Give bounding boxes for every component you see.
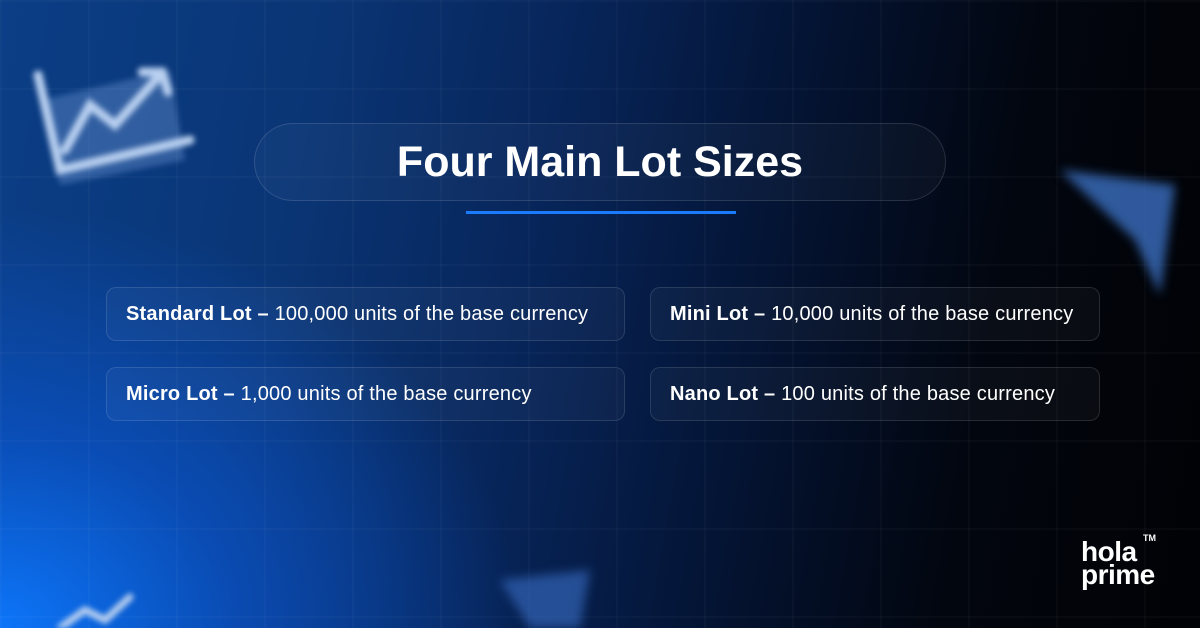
- icon: blurred chart: [30, 63, 198, 186]
- card: nano lot: Nano Lot – 100 units of the base currency: [670, 383, 1055, 405]
- icon: blurred chart bottom: [54, 590, 137, 628]
- title: Four Main Lot Sizes: [397, 138, 803, 186]
- logo: [1081, 533, 1156, 590]
- card: micro lot: Micro Lot – 1,000 units of the base currency: [126, 383, 532, 405]
- title underline: [466, 211, 736, 214]
- logo: prime: [1081, 559, 1155, 590]
- icon: blurred arrow right: [1058, 164, 1182, 296]
- icon: blurred arrow bottom: [498, 565, 594, 628]
- card: nano lot: [650, 367, 1100, 421]
- card: standard lot: [106, 287, 625, 341]
- card: mini lot: [650, 287, 1100, 341]
- card: mini lot: Mini Lot – 10,000 units of the base currency: [670, 303, 1073, 325]
- card: standard lot: Standard Lot – 100,000 units of the base currency: [126, 303, 588, 325]
- text: TM: [1143, 533, 1156, 543]
- card: micro lot: [106, 367, 625, 421]
- title: [254, 123, 946, 201]
- logo: hola: [1081, 536, 1137, 567]
